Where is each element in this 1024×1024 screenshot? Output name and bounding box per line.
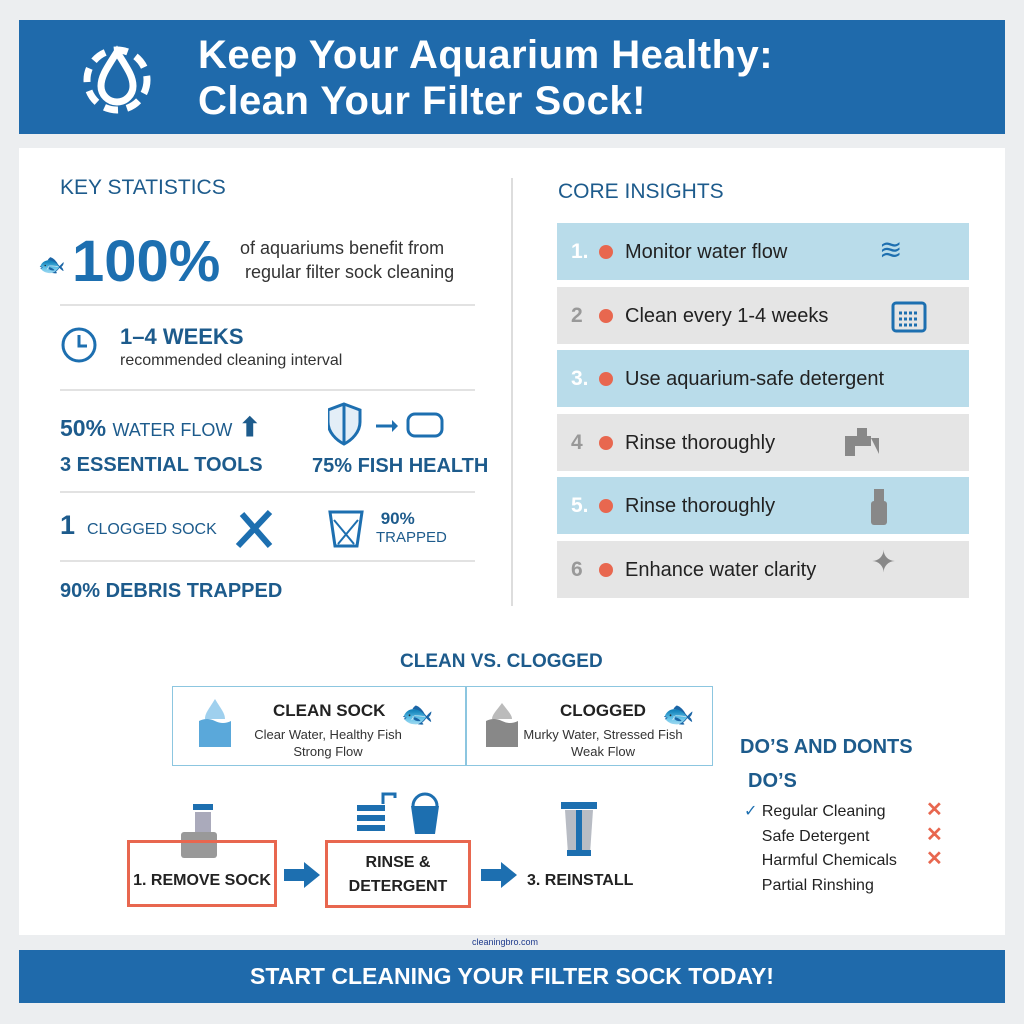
panel: key statistics: 90% DEBRIS TRAPPED [60,580,282,602]
panel: dos and donts: DO’S AND DONTS [740,736,913,758]
panel: key statistics: 3 ESSENTIAL TOOLS [60,454,263,476]
step 2 rinse: RINSE & [366,854,430,871]
icon: shield and sponge [328,402,444,446]
panel: dos and donts: ✕ [926,848,943,870]
comparison box [172,686,713,766]
panel: dos and donts [740,736,943,894]
insight 2: Clean every 1-4 weeks [625,305,828,327]
stat weeks: recommended cleaning interval [120,352,342,369]
panel: key statistics: TRAPPED [376,529,447,546]
clean sock: 🐟 [401,699,433,729]
title [198,33,773,123]
insight 6 [557,541,969,598]
footer banner [19,950,1005,1003]
clogged: Weak Flow [571,744,635,759]
clogged: 🐟 [662,699,694,729]
panel: key statistics: 75% FISH HEALTH [312,455,488,477]
insight 1: Monitor water flow [625,241,787,263]
stat 100% [38,229,454,294]
panel: dos and donts: Harmful Chemicals [762,852,897,869]
clean sock [199,699,433,759]
insight 5: 5. [571,494,589,517]
stat weeks [62,324,342,369]
insight 5 [557,477,969,534]
clean sock: CLEAN SOCK [273,701,385,720]
stat 100%: of aquariums benefit from [240,238,444,258]
clogged [486,699,694,759]
stat weeks: 1–4 WEEKS [120,324,244,349]
title: Clean Your Filter Sock! [198,79,646,123]
insight 1: ≋ [879,234,902,265]
insight 6: Enhance water clarity [625,559,816,581]
heading core insights: CORE INSIGHTS [558,180,724,203]
insight 4: Rinse thoroughly [625,432,775,454]
step 2 rinse [325,792,471,908]
icon: water drop gear [84,46,150,114]
insight 2 [557,287,969,344]
step 1 remove sock [127,804,277,907]
watermark: cleaningbro.com [472,937,538,947]
panel: key statistics: 1 CLOGGED SOCK [60,510,217,540]
insight 5: Rinse thoroughly [625,495,775,517]
panel: dos and donts: ✕ [926,799,943,821]
insight 3 [557,350,969,407]
insight 1 [557,223,969,280]
stat grid: 50% WATER FLOW ⬆ [60,412,261,442]
insight 3: 3. [571,367,589,390]
insight 6: 6 [571,558,583,581]
step 2 rinse: DETERGENT [349,878,447,895]
clean sock: Strong Flow [293,744,363,759]
arrow 2 [481,862,517,888]
clogged: Murky Water, Stressed Fish [523,727,683,742]
insight 4 [557,414,969,471]
main panel [19,148,1005,935]
panel: dos and donts: Safe Detergent [762,828,869,844]
insight 4: 4 [571,431,583,454]
stat 100%: regular filter sock cleaning [245,262,454,282]
header banner [19,20,1005,134]
footer banner: START CLEANING YOUR FILTER SOCK TODAY! [250,963,774,989]
panel: dos and donts: DO’S [748,770,797,792]
panel: dos and donts: Partial Rinshing [762,876,874,894]
arrow 1 [284,862,320,888]
title: Keep Your Aquarium Healthy: [198,33,773,77]
panel: dos and donts: ✕ [926,824,943,846]
panel: dos and donts: ✓ Regular Cleaning [744,803,885,820]
step 1 remove sock: 1. REMOVE SOCK [133,872,271,889]
icon: basket [328,510,364,548]
panel: key statistics [38,176,488,602]
clean sock: Clear Water, Healthy Fish [254,727,402,742]
insight 1: 1. [571,240,589,263]
step 3 reinstall: 3. REINSTALL [527,872,633,889]
heading clean vs clogged: CLEAN VS. CLOGGED [400,651,603,672]
stat 100%: 100% [72,229,220,294]
insight 2: 2 [571,304,583,327]
panel: key statistics: 90% [381,509,415,528]
heading key statistics: KEY STATISTICS [60,176,226,199]
step 3 reinstall [527,802,633,889]
insight 6: ✦ [871,546,896,579]
insight 3: Use aquarium-safe detergent [625,368,884,390]
icon: tools [236,510,272,548]
clogged: CLOGGED [560,701,646,720]
stat 100%: 🐟 [38,252,65,277]
